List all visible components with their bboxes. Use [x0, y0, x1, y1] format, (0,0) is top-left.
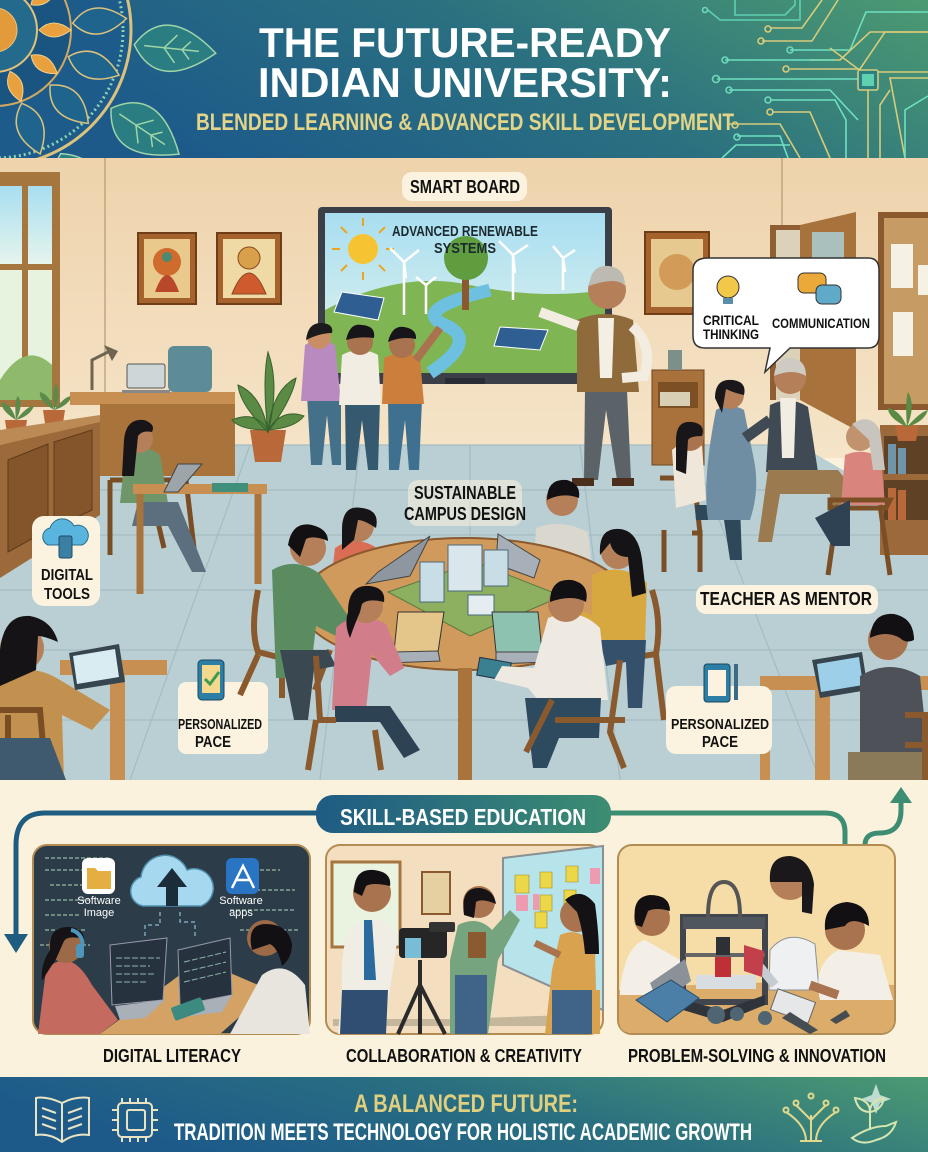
person right: [230, 920, 310, 1034]
window: [0, 172, 60, 407]
header banner: [0, 0, 928, 158]
arrow: right flow: [605, 787, 912, 845]
label: digital tools: [32, 516, 100, 606]
footer banner: [0, 1077, 928, 1152]
sustainable campus label: SUSTAINABLE: [414, 483, 516, 503]
smart board: [318, 207, 612, 384]
label: personalized pace left: PACE: [195, 734, 231, 751]
wall: [0, 158, 928, 458]
table top: [300, 538, 630, 670]
software image label: [77, 895, 121, 919]
board heading: ADVANCED RENEWABLE: [392, 223, 538, 240]
icon: tablet check: [198, 660, 224, 700]
icon: chat bubbles: [798, 273, 841, 304]
critical thinking text: CRITICAL: [703, 312, 759, 328]
critical thinking text: THINKING: [703, 326, 759, 342]
chairs: [240, 590, 330, 698]
video camera on tripod: [398, 922, 455, 1034]
icon: open book: [36, 1098, 89, 1142]
label: personalized pace right: [666, 664, 772, 754]
laptops: [110, 938, 232, 1020]
software image label: Image: [84, 907, 114, 919]
software apps label: Software: [219, 895, 263, 907]
software apps label: apps: [229, 907, 253, 919]
icon: cloud upload: [131, 855, 213, 906]
side shelf: [652, 350, 704, 465]
smart board label: [402, 172, 527, 201]
wall map: [422, 872, 450, 914]
floor tiles: [0, 445, 928, 780]
software apps label: [219, 895, 263, 919]
label: personalized pace left: [178, 682, 268, 754]
right bookshelf with plant: [880, 392, 928, 555]
person left: [38, 927, 118, 1034]
panel: problem-solving: [618, 845, 895, 1034]
icon: sprout in hand: [852, 1084, 896, 1143]
back student right: [534, 480, 592, 572]
students at board: [301, 323, 440, 470]
footer heading: A BALANCED FUTURE:: [354, 1090, 578, 1118]
label: digital tools: DIGITAL: [41, 567, 93, 584]
left student: [272, 524, 356, 720]
pill heading: SKILL-BASED EDUCATION: [340, 804, 586, 830]
cameraman: [338, 870, 398, 1034]
icon: folder: [82, 858, 115, 894]
large potted plant: [232, 352, 304, 462]
front student white: [494, 580, 625, 768]
arrow: left flow: [4, 813, 320, 953]
mentor group: [660, 358, 890, 575]
mandala ornament: [0, 0, 217, 158]
back student left: [331, 507, 381, 583]
student front left with tablet: [0, 616, 167, 780]
label: personalized pace right: PERSONALIZED: [671, 716, 769, 733]
right student yellow: [562, 529, 647, 708]
round table group: [240, 480, 664, 780]
classroom scene: [0, 158, 928, 780]
subtitle: BLENDED LEARNING & ADVANCED SKILL DEVELOPMENT: [196, 109, 734, 136]
sustainable campus label: CAMPUS DESIGN: [404, 504, 526, 524]
label: collaboration and creativity: COLLABORATION & CREATIVITY: [346, 1046, 582, 1066]
laptops back: [366, 536, 430, 584]
front student pink: [308, 586, 420, 770]
back office desk: [70, 345, 235, 476]
label: personalized pace left: PERSONALIZED: [178, 716, 262, 733]
left cabinets: [0, 415, 100, 578]
label: digital tools: TOOLS: [44, 586, 90, 603]
teacher: [540, 266, 647, 486]
icon: app store: [226, 858, 259, 894]
3d printer: [683, 882, 765, 1022]
critical thinking text: [703, 312, 759, 342]
sustainable campus label: [404, 480, 526, 526]
label: digital literacy: DIGITAL LITERACY: [103, 1046, 241, 1066]
communication text: COMMUNICATION: [772, 315, 870, 331]
parts on table: [636, 980, 850, 1034]
label: personalized pace right: PACE: [702, 734, 738, 751]
student green: [450, 886, 520, 1034]
label: teacher as mentor: TEACHER AS MENTOR: [700, 589, 872, 609]
icon: chip: [112, 1098, 158, 1142]
student front right with tablet: [760, 614, 928, 780]
campus model: [388, 545, 562, 636]
student at laptop back left: [110, 420, 267, 594]
painting: ganesha: [217, 233, 281, 304]
floor: [0, 445, 928, 780]
icon: light bulb: [717, 276, 739, 304]
software image label: Software: [77, 895, 121, 907]
smart board label: SMART BOARD: [410, 177, 520, 197]
glass board: [503, 846, 603, 1010]
speech bubble: skills: [693, 258, 879, 372]
panel: collaboration: [326, 845, 603, 1034]
robot: [750, 856, 819, 990]
door: [770, 212, 856, 430]
circuit ornament: [702, 0, 928, 158]
potted plants on left cabinet: [2, 384, 72, 440]
board heading line 2: SYSTEMS: [434, 240, 496, 257]
student left: [620, 895, 691, 1005]
title: THE FUTURE-READY: [259, 19, 671, 66]
panel: digital literacy: [33, 845, 310, 1034]
held red part: [744, 945, 764, 977]
student right: [810, 902, 893, 1000]
skills section: [0, 780, 928, 1077]
front laptops: [394, 612, 444, 652]
bulletin board: [878, 212, 928, 410]
label: teacher as mentor: [696, 585, 878, 614]
pill heading: [316, 795, 611, 833]
title line 2: INDIAN UNIVERSITY:: [258, 59, 672, 106]
painting: goddess: [138, 233, 196, 304]
student yellow: [535, 894, 600, 1034]
label: problem solving and innovation: PROBLEM-SOLVING & INNOVATION: [628, 1046, 886, 1066]
icon: circuit tree: [784, 1094, 838, 1141]
painting: right: [645, 232, 709, 314]
